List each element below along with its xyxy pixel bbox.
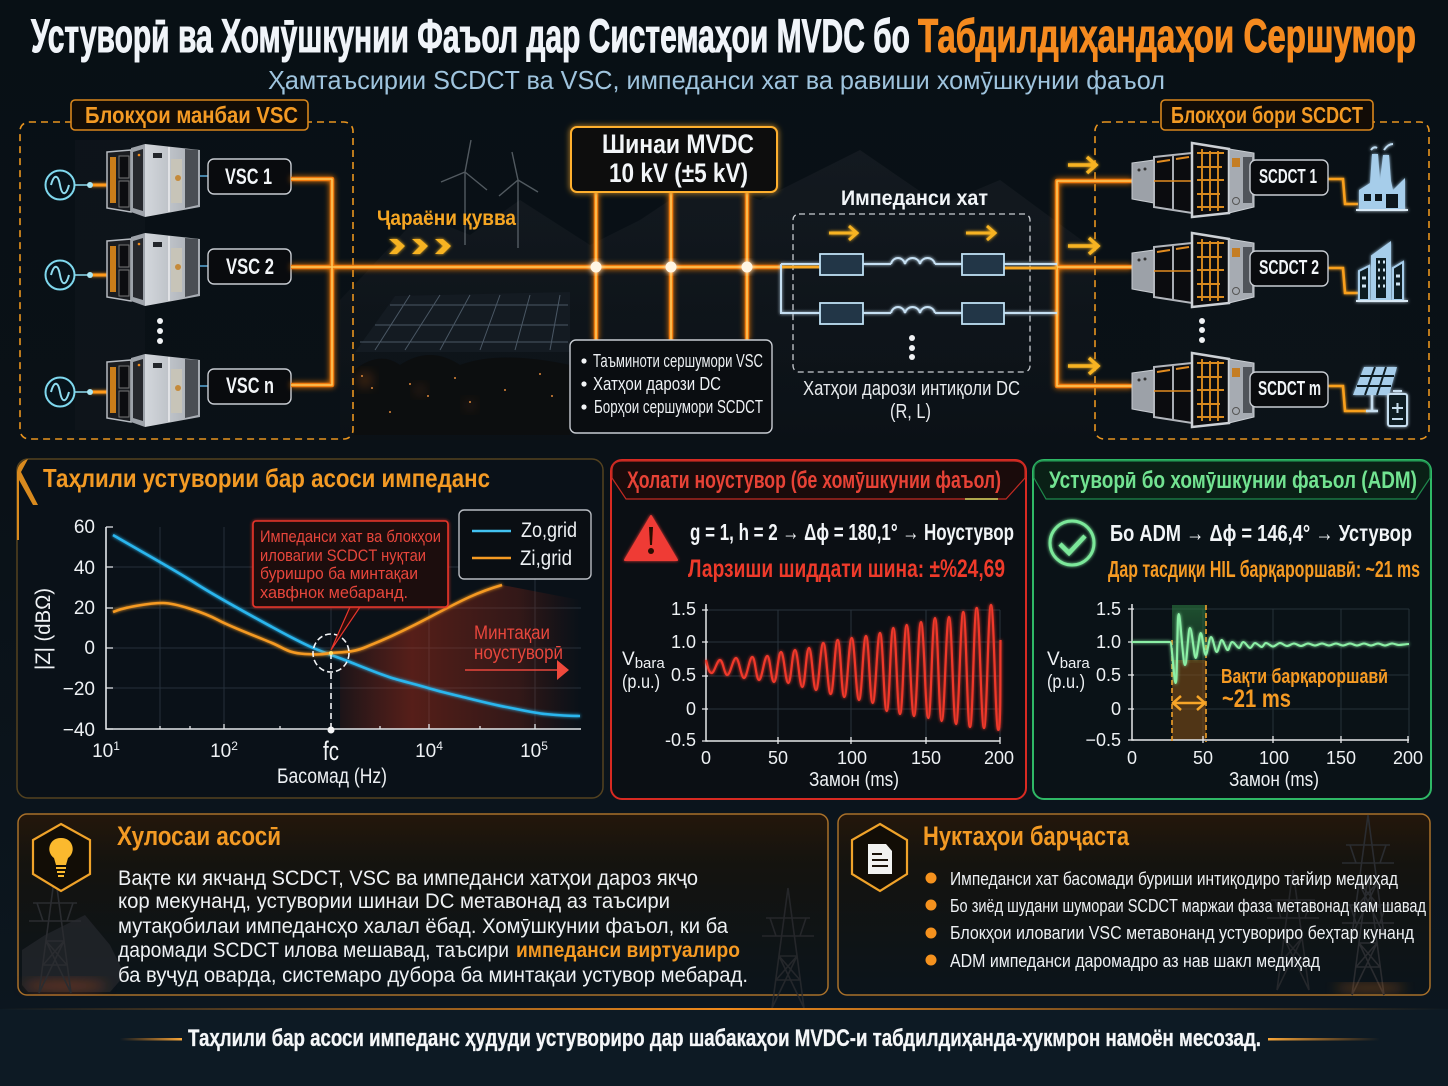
background landscape <box>75 140 1380 440</box>
y title: V <box>1047 649 1060 670</box>
AC feeders <box>75 176 208 395</box>
panel: impedance stability analysis <box>17 459 603 798</box>
icon: AC source 1 <box>46 170 74 200</box>
x ticks: 50 <box>1193 748 1213 768</box>
metric: bus oscillation: Ларзиши шиддати шина: ±%24,69 <box>688 555 1005 583</box>
load feeders <box>1328 179 1368 411</box>
y ticks: 1.5 <box>1096 599 1121 619</box>
callout: risk note <box>253 521 448 650</box>
x ticks: 100 <box>1259 748 1289 768</box>
label: unstable region <box>465 623 569 680</box>
badge: SCDCT load blocks: Блокҳои бори SCDCT <box>1171 102 1363 128</box>
y axis ticks: 40 <box>74 558 95 579</box>
label: VSC 1: VSC 1 <box>225 164 272 189</box>
chart: Bode magnitude <box>32 510 591 788</box>
cabinet: SCDCT 2 <box>1132 233 1254 307</box>
x ticks <box>1127 748 1423 768</box>
dots <box>1199 318 1205 343</box>
y ticks: 1.5 <box>671 599 696 619</box>
y ticks: 0 <box>1111 699 1121 719</box>
dots <box>909 335 915 360</box>
power bus lines <box>291 179 1132 386</box>
label: power flow: Ҷараёни қувва <box>377 207 516 230</box>
cabinet: SCDCT 1 <box>1132 143 1254 217</box>
caption: long DC lines: (R, L) <box>890 401 931 423</box>
caption: long DC lines <box>803 378 1020 423</box>
arrows: into loads <box>1068 157 1098 374</box>
waveform <box>706 605 1000 730</box>
box: bus notes <box>570 340 772 433</box>
panel: key conclusion <box>18 814 828 1008</box>
label: unstable region: ноустуворӣ <box>474 643 563 664</box>
panel: SCDCT load blocks <box>1068 100 1429 439</box>
box: bus notes: Борҳои сершумори SCDCT <box>594 397 763 417</box>
heading: Ҳолати ноустувор (бе хомӯшкунии фаъол) <box>627 467 1001 494</box>
y axis ticks: −40 <box>63 720 95 741</box>
callout: risk note: Импеданси хат ва блокҳои <box>260 527 441 546</box>
subtitle: Ҳамтаъсирии SCDCT ва VSC, импеданси хат ва равиши хомӯшкунии фаъол <box>268 65 1165 95</box>
label: SCDCT 2 <box>1250 251 1328 286</box>
badge: VSC source blocks: Блокҳои манбаи VSC <box>85 102 298 128</box>
x ticks: 200 <box>984 748 1014 768</box>
conclusion text: кор мекунанд, устувории шинаи DC метавонад аз таъсири <box>118 890 670 913</box>
y ticks: −0.5 <box>1085 730 1121 750</box>
x ticks: 150 <box>1326 748 1356 768</box>
label: SCDCT 1 <box>1250 160 1328 195</box>
label: crossover frequency: fc <box>323 736 339 766</box>
x axis ticks: 10 <box>92 741 113 762</box>
curve: Zi,grid <box>113 585 502 654</box>
y title <box>622 649 665 693</box>
x title: Замон (ms) <box>809 769 899 791</box>
bullet list <box>926 869 1426 971</box>
label: VSC 1 <box>208 159 291 194</box>
x ticks: 0 <box>701 748 711 768</box>
label: VSC 2 <box>208 249 291 284</box>
y title: V <box>622 649 635 670</box>
conclusion text: ба вуҷуд оварда, системаро дубора ба минтақаи устувор мебарад. <box>118 964 748 987</box>
dots <box>157 318 163 344</box>
x ticks: 100 <box>837 748 867 768</box>
box: MVDC bus <box>571 127 777 192</box>
icon: wind turbines <box>441 140 538 248</box>
x axis ticks: 4 <box>436 739 443 753</box>
y title: bara <box>1060 655 1090 672</box>
x axis ticks <box>92 739 548 762</box>
label: recovery time: ~21 ms <box>1222 685 1291 713</box>
title: Устуворӣ ва Хомӯшкунии Фаъол дар Системаҳои MVDC бо <box>31 9 910 62</box>
label: recovery time: Вақти барқароршавӣ <box>1221 666 1388 688</box>
cabinet: VSC 2 <box>107 233 200 306</box>
bullet list: ADM импеданси даромадро аз нав шакл медиҳад <box>950 951 1320 971</box>
x axis ticks: 10 <box>415 741 436 762</box>
icon: solar panel and battery <box>1353 367 1407 426</box>
y title: bara <box>635 655 665 672</box>
x title: Замон (ms) <box>1229 769 1319 791</box>
label: unstable region: Минтақаи <box>474 623 550 644</box>
x axis ticks: 1 <box>113 739 120 753</box>
icon: check mark <box>1050 521 1094 565</box>
label: VSC n <box>208 369 291 404</box>
conclusion text: мутақобилаи импедансҳо халал ёбад. Хомӯшкунии фаъол, ки ба <box>118 915 728 938</box>
y axis ticks: 0 <box>84 638 95 659</box>
cabinet: VSC n <box>107 354 200 427</box>
arrows: current direction <box>829 226 995 240</box>
cabinet: SCDCT m <box>1132 353 1254 427</box>
y ticks: 0 <box>686 699 696 719</box>
icon: document <box>852 824 907 891</box>
label: VSC 2: VSC 2 <box>226 254 274 279</box>
y title: (p.u.) <box>1047 672 1085 693</box>
icon: factory <box>1356 144 1408 210</box>
y title: (p.u.) <box>622 672 660 693</box>
icon: AC source n <box>46 378 74 406</box>
label: VSC n: VSC n <box>226 373 274 398</box>
y title <box>1047 649 1090 693</box>
icon: chevrons <box>389 239 451 254</box>
y axis ticks: −20 <box>63 679 95 700</box>
icon: AC source 2 <box>46 260 74 290</box>
label: SCDCT m <box>1250 372 1328 407</box>
cabinet: VSC 1 <box>107 144 200 217</box>
legend: Zi,grid <box>520 547 572 570</box>
callout: risk note: буришро ба минтақаи <box>260 564 418 583</box>
x ticks: 50 <box>768 748 788 768</box>
callout: risk note: иловагии SCDCT нуқтаи <box>260 546 426 565</box>
heading: Хулосаи асосӣ <box>117 821 281 851</box>
y ticks <box>1085 599 1121 750</box>
label: recovery time <box>1221 666 1388 713</box>
background pylons <box>1267 815 1406 995</box>
label: SCDCT 1: SCDCT 1 <box>1259 166 1317 188</box>
y axis title: |Z| (dBΩ) <box>32 588 55 670</box>
panel: unstable case <box>611 460 1026 799</box>
panel: VSC source blocks <box>20 100 353 439</box>
x axis ticks: 10 <box>210 741 231 762</box>
circuit lines <box>781 258 1057 313</box>
label: power flow <box>377 207 516 254</box>
label: SCDCT 2: SCDCT 2 <box>1259 257 1319 279</box>
resistors <box>820 254 1004 324</box>
background pylons and hills <box>22 873 814 1008</box>
crossover marker <box>313 634 349 734</box>
heading: Таҳлили устувории бар асоси импеданс <box>43 463 490 493</box>
x axis ticks: 10 <box>520 741 541 762</box>
recovery window <box>1172 605 1206 742</box>
x ticks <box>701 748 1014 768</box>
legend: Zo,grid <box>521 519 577 542</box>
box: bus notes: Хатҳои дарози DC <box>593 374 721 394</box>
y ticks: 1.0 <box>1096 632 1121 652</box>
legend <box>459 510 591 579</box>
x ticks: 0 <box>1127 748 1137 768</box>
formula: phase margin: g = 1, h = 2 → Δϕ = 180,1° → Ноустувор <box>690 519 1014 545</box>
icon: light bulb <box>33 824 90 891</box>
label: SCDCT m: SCDCT m <box>1258 378 1321 400</box>
curve: Zo,grid <box>113 535 580 716</box>
heading: line impedance: Импеданси хат <box>841 187 988 210</box>
icon: warning triangle <box>625 516 677 560</box>
panel: stable with ADM <box>1033 460 1431 799</box>
box: MVDC bus: 10 kV (±5 kV) <box>609 158 748 188</box>
y axis ticks <box>63 517 95 741</box>
x axis ticks: 5 <box>541 739 548 753</box>
waveform <box>1132 614 1409 683</box>
y ticks: 0.5 <box>1096 665 1121 685</box>
box: bus notes: Таъминоти сершумори VSC <box>593 351 763 371</box>
conclusion text: импеданси виртуалиро <box>516 939 740 962</box>
icon: city buildings <box>1356 243 1408 301</box>
chart: bus voltage without active damping <box>622 599 1014 791</box>
caption: long DC lines: Хатҳои дарози интиқоли DC <box>803 378 1020 400</box>
y axis ticks: 20 <box>74 598 95 619</box>
y ticks: 0.5 <box>671 665 696 685</box>
footer <box>0 1008 1448 1086</box>
heading: Нуктаҳои барҷаста <box>923 821 1130 851</box>
bus nodes <box>590 262 752 272</box>
conclusion text: даромади SCDCT илова мешавад, таъсири <box>118 939 509 962</box>
y ticks: -0.5 <box>665 730 696 750</box>
chart: bus voltage with active damping <box>1047 599 1423 791</box>
conclusion text: Вақте ки якчанд SCDCT, VSC ва импеданси хатҳои дароз якҷо <box>118 867 698 890</box>
box: MVDC bus: Шинаи MVDC <box>602 129 754 159</box>
x axis title: Басомад (Hz) <box>277 765 387 788</box>
panel: highlights <box>838 814 1430 995</box>
line impedance block <box>781 187 1057 423</box>
y axis ticks: 60 <box>74 517 95 538</box>
conclusion text <box>118 867 748 987</box>
callout: risk note: хавфнок мебаранд. <box>260 583 408 602</box>
x ticks: 150 <box>911 748 941 768</box>
y ticks: 1.0 <box>671 632 696 652</box>
x axis ticks: 2 <box>231 739 238 753</box>
x ticks: 200 <box>1393 748 1423 768</box>
y ticks <box>665 599 696 750</box>
